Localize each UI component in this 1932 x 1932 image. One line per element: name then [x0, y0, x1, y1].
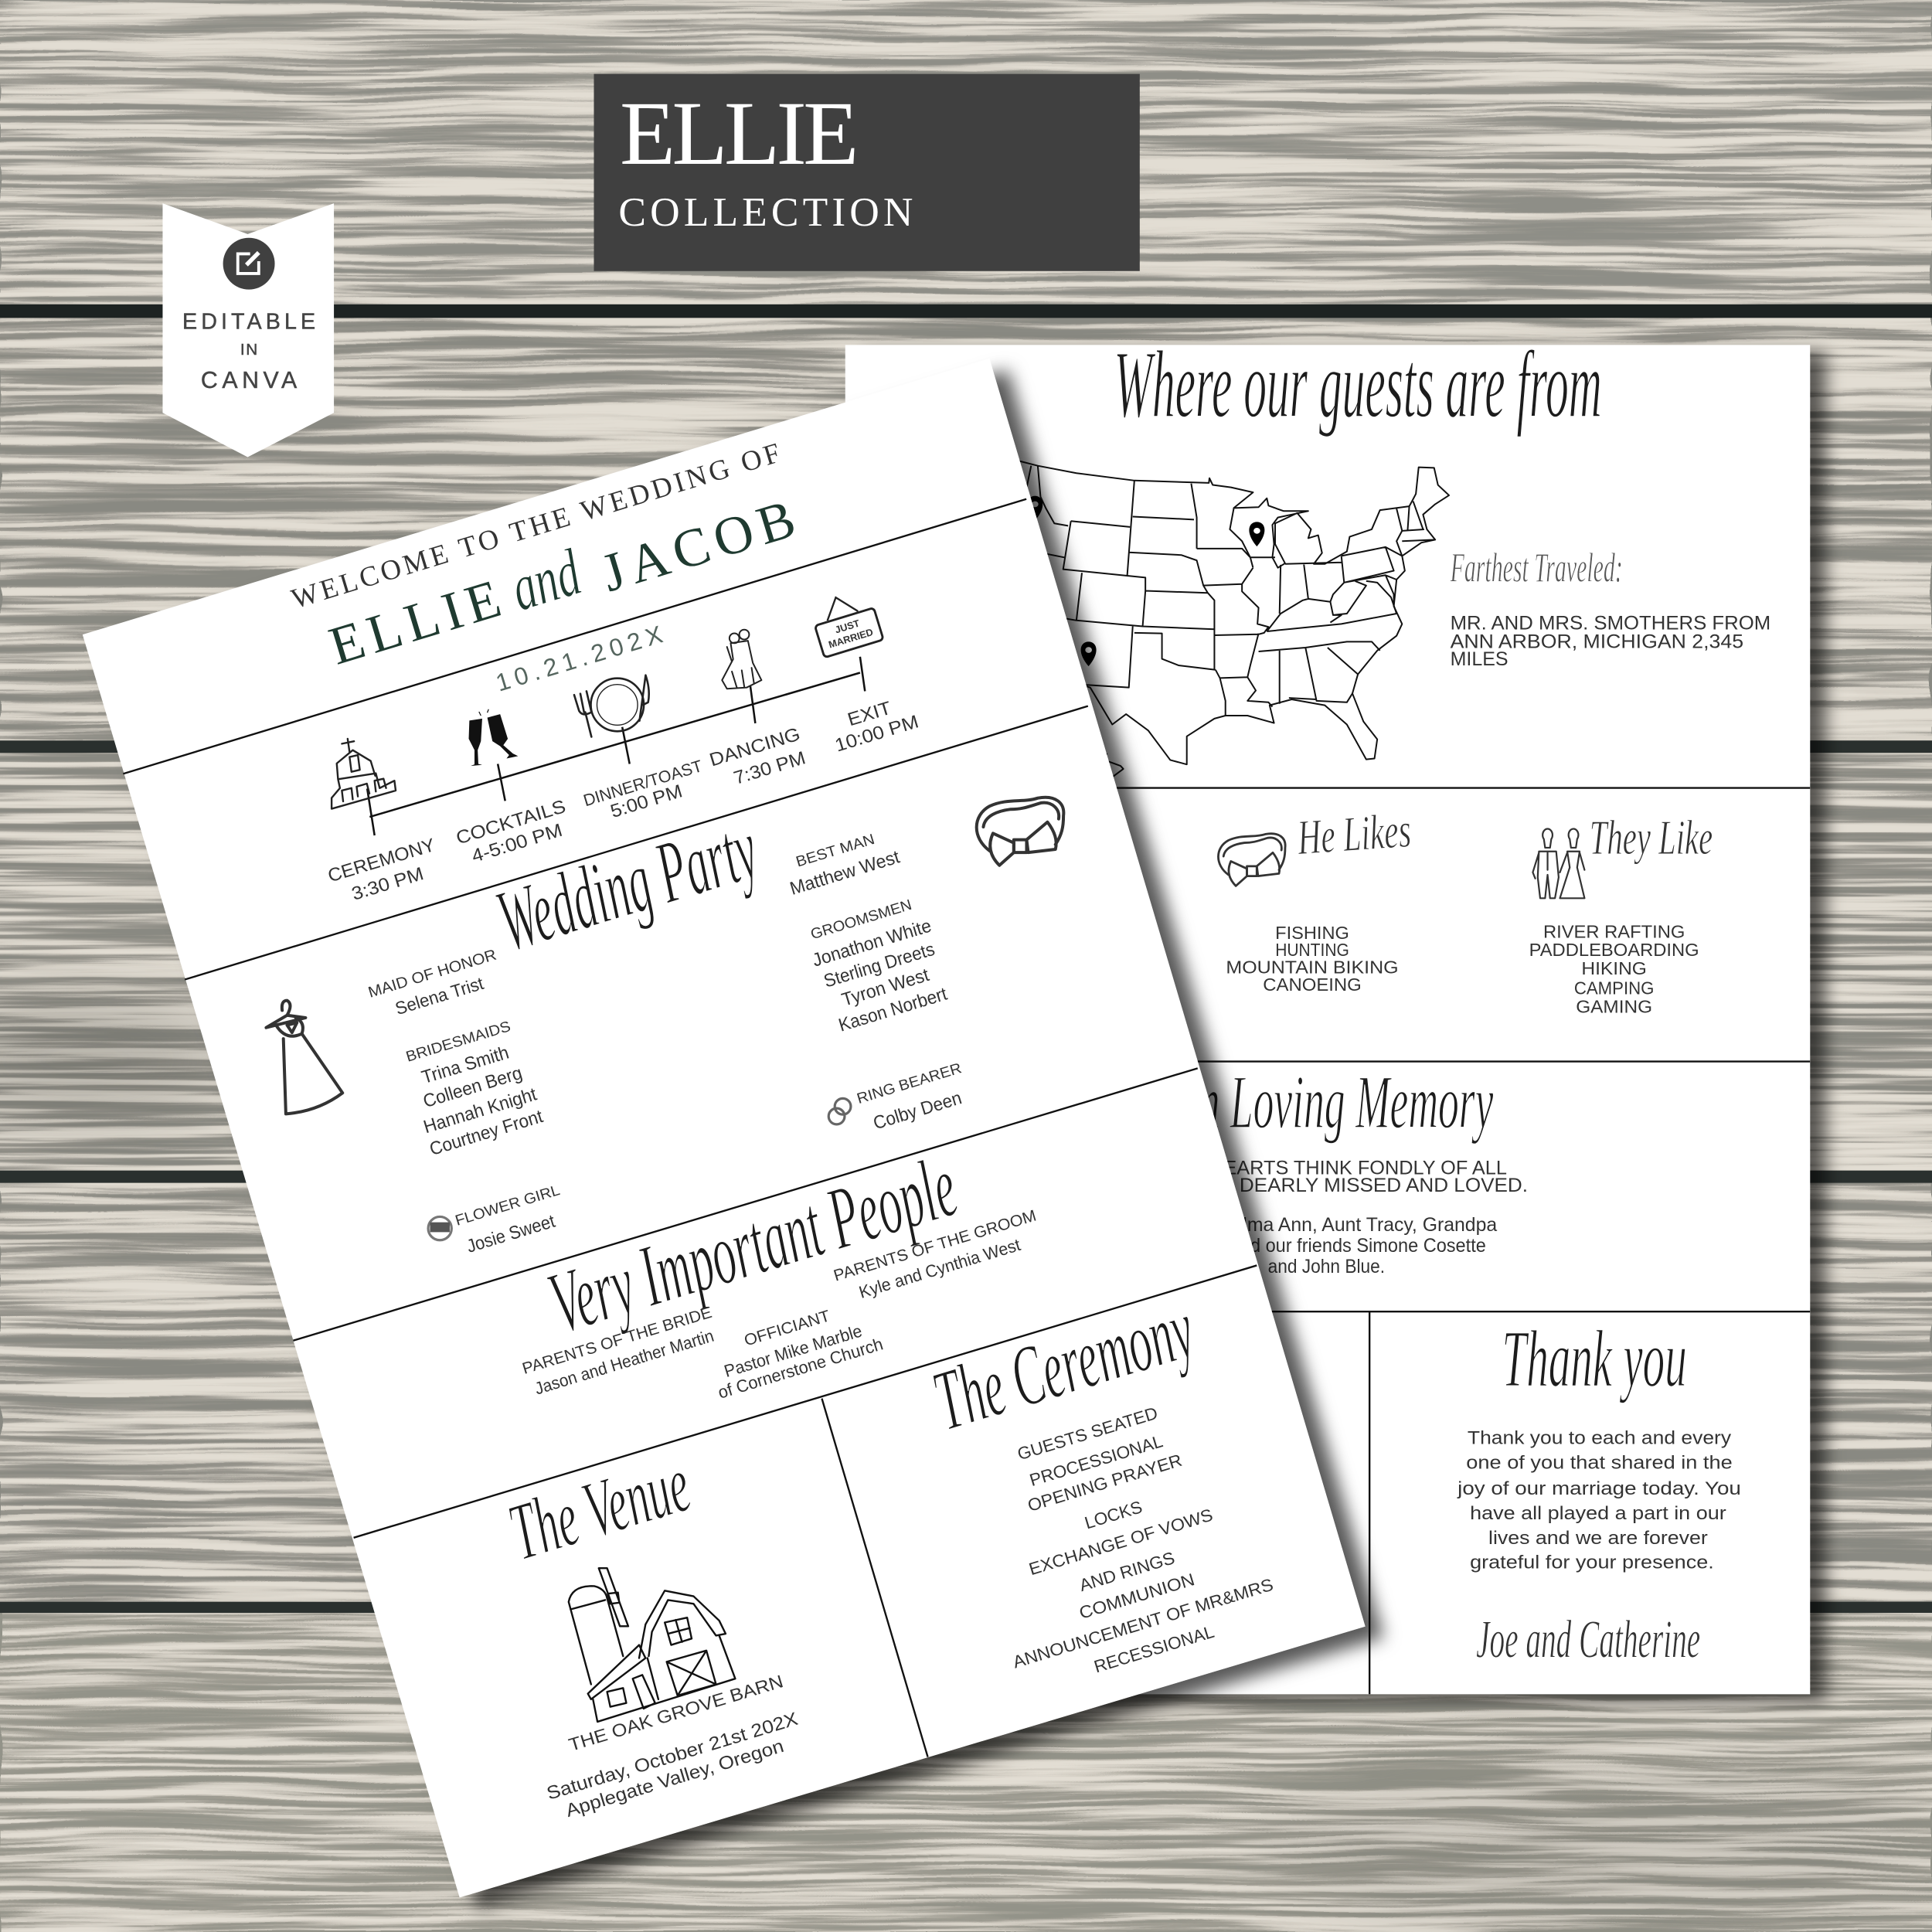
label: dancing: DANCING — [707, 723, 803, 771]
couple names: JACOB — [595, 488, 802, 604]
label: dinner: 5:00 PM — [608, 781, 685, 822]
they like list: RIVER RAFTING — [1543, 921, 1685, 941]
they like list: CAMPING — [1574, 978, 1654, 998]
he likes heading: He Likes — [1295, 802, 1413, 865]
back page — [845, 331, 1810, 1694]
label: dinner: DINNER/TOAST — [581, 757, 705, 810]
icon: barn — [569, 1568, 735, 1722]
badge shape — [162, 203, 334, 457]
they like list — [1529, 921, 1699, 1017]
back page section dividers — [845, 788, 1810, 1694]
label: ceremony — [325, 835, 437, 905]
ceremony order list: PROCESSIONAL — [1027, 1431, 1165, 1490]
bride side party: Courtney Front — [427, 1106, 546, 1160]
very important people section — [520, 1137, 1039, 1403]
farthest traveled text: MILES — [1451, 649, 1509, 670]
banner background — [594, 74, 1140, 271]
he likes list: MOUNTAIN BIKING — [1226, 957, 1399, 978]
ceremony order list: ANNOUNCEMENT OF MR&MRS — [1011, 1575, 1275, 1672]
icon: dancing couple — [722, 630, 761, 689]
couple names — [322, 488, 802, 677]
venue details: THE OAK GROVE BARN — [566, 1671, 785, 1755]
map outline — [977, 460, 1449, 764]
thank you message: lives and we are forever — [1488, 1528, 1708, 1549]
bride side party: Trina Smith — [419, 1043, 512, 1088]
ceremony order list — [1011, 1403, 1275, 1676]
front page section dividers — [123, 499, 1257, 1757]
label: ceremony: CEREMONY — [325, 835, 437, 886]
icon: just married sign: JUST — [834, 617, 861, 636]
banner title: ELLIE — [620, 83, 859, 184]
ceremony order list: AND RINGS — [1077, 1548, 1177, 1595]
they like list: GAMING — [1576, 997, 1652, 1017]
back page sheet — [845, 345, 1810, 1694]
groom side party: Sterling Dreets — [821, 939, 937, 992]
thank you heading: Thank you — [1502, 1314, 1687, 1404]
bride side party: BRIDESMAIDS — [404, 1019, 512, 1066]
front page — [83, 359, 1366, 1897]
bride side party: Hannah Knight — [421, 1083, 539, 1138]
groom side party — [787, 832, 950, 1036]
venue details: Saturday, October 21st 202X — [544, 1709, 801, 1804]
map pin: wisconsin — [1249, 522, 1264, 546]
ceremony order list: LOCKS — [1082, 1497, 1145, 1532]
thank you message: have all played a part in our — [1470, 1503, 1726, 1524]
front page sheet — [83, 359, 1366, 1897]
groom side party: GROOMSMEN — [809, 897, 913, 943]
they like heading: They Like — [1590, 810, 1713, 865]
ceremony order list: GUESTS SEATED — [1015, 1403, 1160, 1464]
label: exit — [832, 698, 921, 757]
ring bearer: Colby Deen — [871, 1087, 964, 1134]
parents of the bride: PARENTS OF THE BRIDE — [520, 1304, 714, 1378]
ceremony order list: COMMUNION — [1077, 1570, 1197, 1623]
they like list: HIKING — [1581, 958, 1647, 978]
icon: edit — [223, 238, 275, 290]
farthest traveled text — [1451, 614, 1770, 670]
couple names: and — [502, 534, 589, 625]
thank you message: Thank you to each and every — [1468, 1428, 1731, 1449]
icon: dress — [266, 1001, 342, 1114]
bride side party: Selena Trist — [393, 973, 486, 1019]
venue details: Applegate Valley, Oregon — [563, 1736, 786, 1821]
label: ceremony: 3:30 PM — [349, 863, 426, 905]
parents of the groom: Kyle and Cynthia West — [857, 1235, 1023, 1302]
in loving memory text: OUR HEARTS THINK FONDLY OF ALL — [1161, 1158, 1507, 1179]
icon: wedding rings — [828, 1098, 851, 1124]
icon: just married sign: MARRIED — [827, 626, 875, 651]
groom side party: BEST MAN — [794, 832, 876, 871]
he likes section — [1218, 802, 1413, 995]
in loving memory text: and John Blue. — [1268, 1257, 1385, 1277]
bride side party — [366, 947, 546, 1160]
thank you message — [1457, 1428, 1741, 1573]
officiant: of Cornerstone Church — [716, 1334, 885, 1403]
icon: bow tie — [977, 798, 1063, 866]
label: cocktails — [454, 796, 568, 867]
ceremony section — [923, 1281, 1275, 1676]
bride side party: Colleen Berg — [420, 1063, 525, 1112]
venue section — [499, 1438, 801, 1821]
bride side party: MAID OF HONOR — [366, 947, 498, 1002]
they like section — [1529, 810, 1713, 1017]
in loving memory text — [1161, 1158, 1528, 1277]
flower girl — [454, 1182, 562, 1257]
label: exit: EXIT — [845, 698, 894, 730]
groom side party: Kason Norbert — [836, 984, 950, 1036]
ceremony order list: OPENING PRAYER — [1026, 1451, 1184, 1515]
thank you message: one of you that shared in the — [1466, 1453, 1733, 1474]
wedding date: 10.21.202X — [492, 620, 665, 697]
label: cocktails: COCKTAILS — [454, 796, 568, 849]
timeline axis and ticks — [367, 657, 865, 835]
label: dancing — [707, 723, 808, 789]
he likes list: FISHING — [1275, 923, 1349, 943]
thank you section — [1457, 1314, 1741, 1669]
badge text: EDITABLE — [182, 310, 315, 335]
he likes list — [1226, 923, 1399, 995]
icon: couple — [1532, 829, 1584, 898]
label: exit: 10:00 PM — [832, 711, 921, 757]
icon: champagne glasses — [469, 709, 518, 766]
he likes list: HUNTING — [1275, 940, 1349, 960]
icon: plate and cutlery — [574, 675, 649, 736]
US map — [977, 460, 1449, 777]
flower girl: FLOWER GIRL — [454, 1182, 562, 1230]
they like list: PADDLEBOARDING — [1529, 940, 1699, 960]
banner subtitle: COLLECTION — [618, 189, 913, 235]
officiant: OFFICIANT — [742, 1307, 832, 1350]
ring bearer: RING BEARER — [855, 1060, 964, 1107]
thank you message: joy of our marriage today. You — [1457, 1478, 1741, 1499]
icon: bow tie — [1218, 834, 1285, 886]
welcome heading: WELCOME TO THE WEDDING OF — [287, 437, 784, 614]
thank you message: grateful for your presence. — [1470, 1553, 1714, 1573]
in loving memory text: Bob and our friends Simone Cosette — [1192, 1236, 1486, 1257]
badge text: CANVA — [201, 368, 298, 393]
ceremony order list: EXCHANGE OF VOWS — [1026, 1505, 1215, 1579]
flower girl: Josie Sweet — [464, 1211, 558, 1257]
icon: just married sign — [808, 588, 883, 658]
wedding party section — [266, 798, 1063, 1257]
hawaii islands — [1101, 751, 1124, 777]
parents of the bride: Jason and Heather Martin — [532, 1326, 716, 1399]
in loving memory text: Grandma Ann, Aunt Tracy, Grandpa — [1194, 1215, 1497, 1236]
the venue heading: The Venue — [499, 1438, 700, 1577]
groom side party: Jonathon White — [810, 915, 934, 971]
badge text — [182, 310, 315, 393]
icon: church — [332, 739, 396, 809]
ring bearer — [855, 1060, 964, 1134]
collection banner — [594, 74, 1140, 271]
editable in canva badge — [162, 203, 334, 457]
map pin: northwest — [1027, 496, 1043, 520]
map state lines — [1025, 466, 1435, 716]
very important people heading: Very Important People — [538, 1137, 968, 1352]
farthest traveled text: ANN ARBOR, MICHIGAN 2,345 — [1451, 632, 1743, 653]
ceremony order list: RECESSIONAL — [1092, 1622, 1216, 1676]
label: cocktails: 4-5:00 PM — [469, 820, 565, 867]
the ceremony heading: The Ceremony — [923, 1281, 1205, 1449]
icon: flower basket — [428, 1216, 451, 1240]
officiant: Pastor Mike Marble — [722, 1321, 864, 1381]
signature: Joe and Catherine — [1476, 1609, 1700, 1669]
farthest traveled text: MR. AND MRS. SMOTHERS FROM — [1451, 614, 1770, 634]
parents of the groom: PARENTS OF THE GROOM — [832, 1206, 1039, 1285]
in loving memory text: THOSE DEARLY MISSED AND LOVED. — [1165, 1175, 1528, 1196]
groom side party: Matthew West — [787, 846, 903, 900]
farthest traveled heading: Farthest Traveled: — [1450, 545, 1623, 591]
couple names: ELLIE — [322, 568, 508, 677]
badge text: IN — [240, 341, 257, 359]
groom side party: Tyron West — [839, 964, 932, 1011]
in loving memory heading: In Loving Memory — [1185, 1060, 1493, 1145]
timeline — [325, 588, 921, 905]
label: dancing: 7:30 PM — [731, 747, 808, 789]
map pin: southwest — [1081, 641, 1097, 666]
wedding party heading: Wedding Party — [486, 799, 768, 970]
venue details — [544, 1671, 801, 1821]
in loving memory section — [1161, 1060, 1528, 1277]
he likes list: CANOEING — [1263, 975, 1362, 995]
